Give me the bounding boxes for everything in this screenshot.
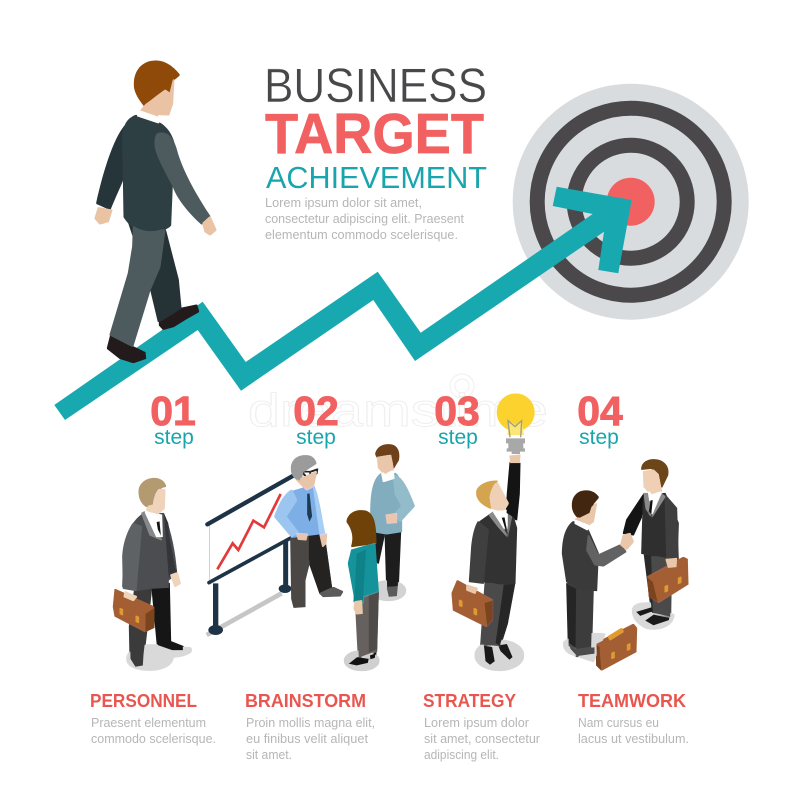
title: TARGET [265,102,484,166]
intro text: Lorem ipsum dolor sit amet, [265,196,422,210]
briefcase on floor [596,624,637,670]
step numbers: 02 [293,388,339,434]
column: strategy [423,691,540,762]
title: BUSINESS [264,60,487,113]
column: strategy: sit amet, consectetur [424,732,540,746]
column: teamwork: TEAMWORK [578,691,686,711]
man in sweater [371,445,414,601]
column: personnel: PERSONNEL [90,691,197,711]
strategy figure [452,455,524,671]
target [513,84,749,320]
step numbers: 04 [577,388,623,434]
intro text [265,196,465,242]
step numbers: step [579,426,619,449]
column: strategy: adipiscing elit. [424,748,499,762]
whiteboard chart [207,476,293,635]
step numbers: 03 [434,388,480,434]
column: personnel [90,691,216,746]
column: strategy: STRATEGY [423,691,516,711]
step numbers [150,388,623,449]
teamwork figures [562,460,688,670]
column: personnel: Praesent elementum [91,716,206,730]
lightbulb [497,393,535,454]
figures: personnel and brainstorm [113,445,414,671]
column: strategy: Lorem ipsum dolor [424,716,529,730]
intro text: elementum commodo scelerisque. [265,228,458,242]
step numbers: 01 [150,388,196,434]
column: personnel: commodo scelerisque. [91,732,216,746]
briefcase [452,581,493,627]
column: teamwork [578,691,689,746]
column: brainstorm: Proin mollis magna elit, [246,716,375,730]
presenter figure [275,456,343,607]
walking businessman [95,61,216,363]
rising arrow [54,187,632,420]
figures: strategy and teamwork [452,393,688,671]
step numbers: step [438,426,478,449]
title [264,60,487,195]
watermark [248,374,548,436]
column: teamwork: lacus ut vestibulum. [578,732,689,746]
title: ACHIEVEMENT [266,160,487,195]
personnel figure [113,478,191,670]
column: brainstorm: BRAINSTORM [245,691,366,711]
step numbers: step [154,426,194,449]
column: brainstorm: eu finibus velit aliquet [246,732,369,746]
watermark: dreamstime [248,384,548,436]
column: brainstorm: sit amet. [246,748,292,762]
briefcase [113,589,154,632]
column: brainstorm [245,691,375,762]
woman figure [344,511,379,671]
intro text: consectetur adipiscing elit. Praesent [265,212,465,226]
step numbers: step [296,426,336,449]
column: teamwork: Nam cursus eu [578,716,659,730]
